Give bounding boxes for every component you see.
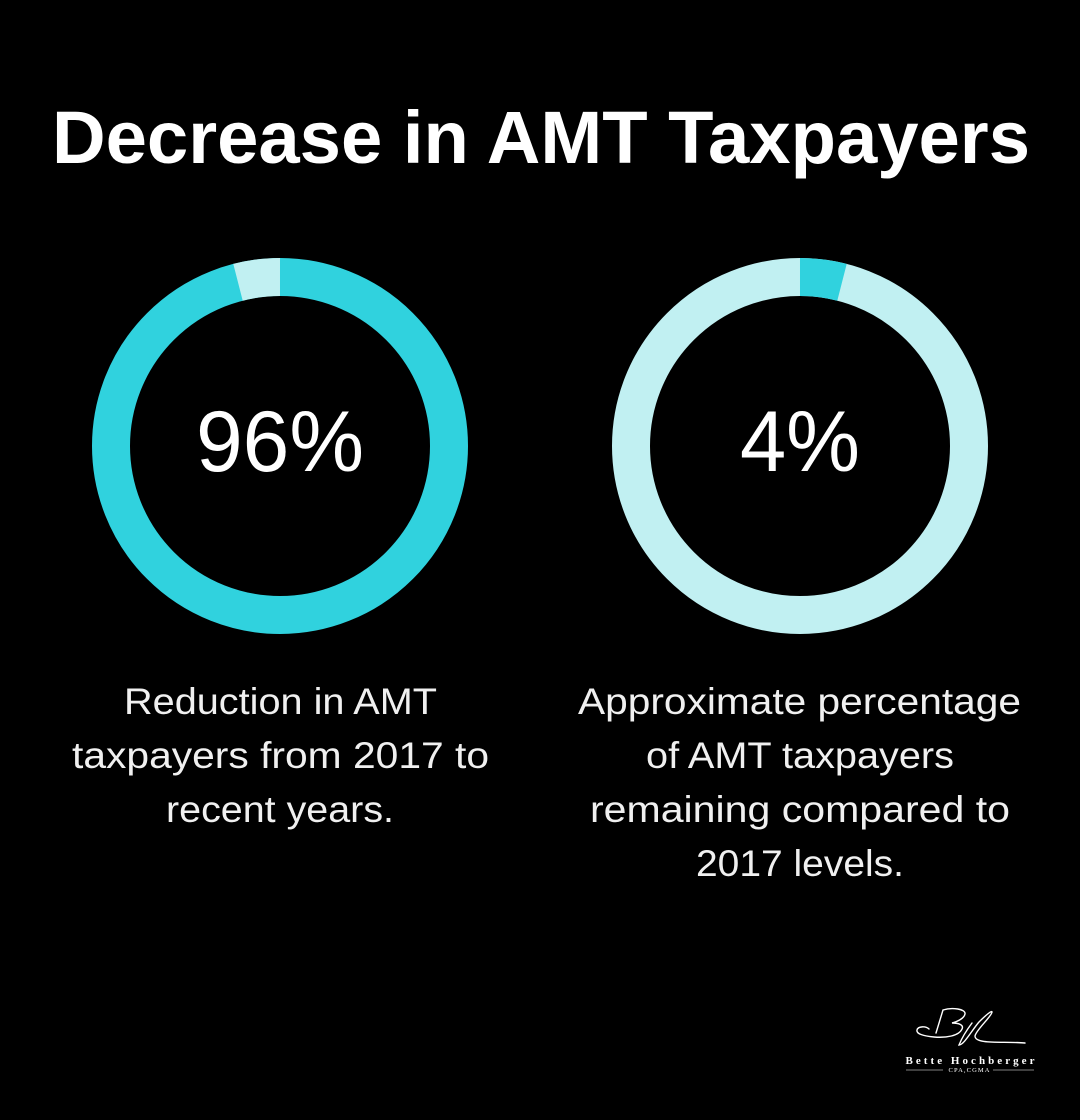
title: Decrease in AMT Taxpayers (52, 96, 1030, 179)
wordmark: Bette Hochberger (906, 1055, 1035, 1067)
description: reduction: taxpayers from 2017 to (72, 735, 489, 776)
description: remaining: of AMT taxpayers (646, 735, 954, 776)
donut chart: 96% (111, 277, 449, 615)
icon: BH signature (917, 1009, 1025, 1045)
credentials: CPA,CGMA (948, 1067, 990, 1074)
description: reduction: recent years. (166, 789, 394, 830)
description: remaining: 2017 levels. (696, 843, 904, 884)
description: reduction: Reduction in AMT (124, 681, 437, 722)
description: remaining (578, 681, 1021, 884)
panel: 4% remaining (578, 277, 1021, 884)
logo: Bette Hochberger (906, 1009, 1035, 1074)
description: remaining: remaining compared to (590, 789, 1010, 830)
description: reduction (72, 681, 489, 830)
description: remaining: Approximate percentage (578, 681, 1021, 722)
donut chart: 4% (631, 277, 969, 615)
value: 4%: 4% (740, 394, 860, 490)
value: 96%: 96% (196, 394, 364, 490)
panel: 96% reduction (72, 277, 489, 830)
